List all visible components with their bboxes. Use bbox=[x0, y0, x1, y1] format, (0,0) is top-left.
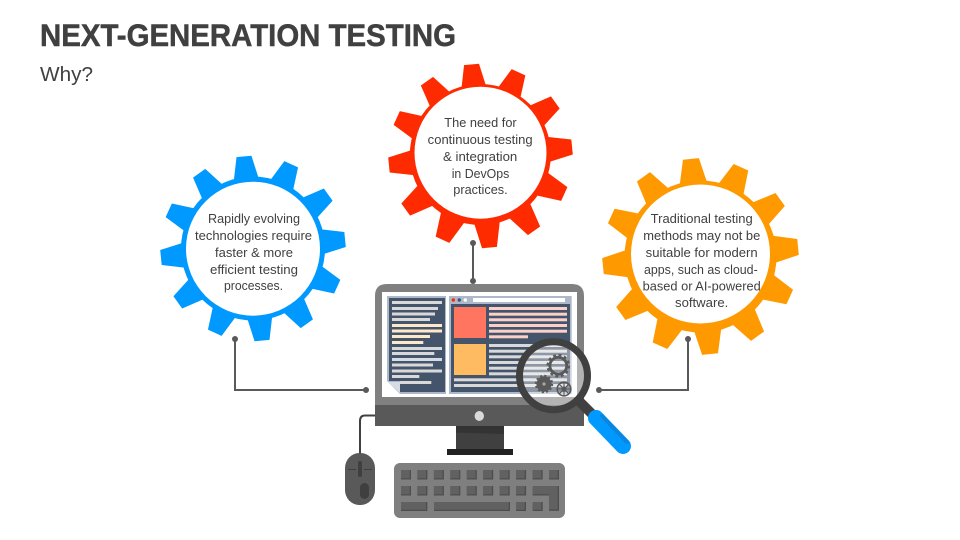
magnifying glass bbox=[515, 340, 627, 446]
text: traditional testing methods: methods may not be bbox=[643, 229, 760, 243]
text: traditional testing methods: software. bbox=[675, 296, 728, 310]
keyboard bbox=[394, 463, 565, 518]
gear shape: blue bbox=[152, 147, 354, 350]
text: rapidly evolving technologies bbox=[195, 212, 312, 293]
text: rapidly evolving technologies: processes. bbox=[224, 279, 283, 293]
browser window panel bbox=[449, 296, 572, 394]
lens gears bbox=[536, 355, 571, 396]
text: traditional testing methods: apps, such as cloud- bbox=[644, 263, 758, 277]
gear shape: red bbox=[380, 55, 581, 257]
text: rapidly evolving technologies: Rapidly evolving bbox=[208, 212, 300, 226]
keyboard key shadows bbox=[401, 470, 559, 511]
text: continuous testing need: The need for bbox=[444, 116, 517, 130]
gear center: orange bbox=[631, 184, 770, 324]
text: traditional testing methods: suitable for modern bbox=[646, 246, 758, 260]
text: traditional testing methods: Traditional testing bbox=[651, 212, 753, 226]
mouse bbox=[345, 453, 375, 505]
monitor stand bbox=[447, 426, 513, 455]
text: rapidly evolving technologies: faster & more bbox=[215, 246, 293, 260]
magnifier handle bbox=[578, 400, 627, 446]
gear center: red bbox=[414, 87, 546, 219]
text: continuous testing need: & integration bbox=[443, 150, 517, 164]
text: traditional testing methods bbox=[643, 212, 761, 310]
code document panel bbox=[387, 296, 446, 394]
title: NEXT-GENERATION TESTING bbox=[40, 17, 456, 53]
gear center: blue bbox=[186, 182, 320, 316]
text: continuous testing need: in DevOps bbox=[452, 167, 509, 181]
panel: orange gear bbox=[593, 149, 808, 364]
mouse cable bbox=[360, 416, 376, 454]
magnifier lens bbox=[523, 346, 584, 406]
connector: top gear to monitor bbox=[470, 240, 476, 284]
power button bbox=[475, 411, 484, 421]
subtitle: Why? bbox=[40, 63, 93, 86]
connector: right gear to monitor bbox=[596, 336, 691, 393]
screen bbox=[382, 292, 577, 397]
text: continuous testing need: continuous testing bbox=[428, 133, 533, 147]
monitor chin bbox=[375, 405, 584, 426]
gear shape: orange bbox=[593, 149, 808, 364]
text: continuous testing need: practices. bbox=[453, 183, 508, 197]
magnifier ring bbox=[520, 342, 588, 410]
monitor bezel bbox=[375, 284, 584, 405]
monitor bbox=[375, 284, 584, 455]
connector: left gear to monitor bbox=[232, 336, 369, 393]
text: rapidly evolving technologies: efficient testing bbox=[210, 263, 298, 277]
text: continuous testing need bbox=[428, 116, 533, 197]
panel: blue gear bbox=[152, 147, 354, 350]
text: traditional testing methods: based or AI-powered bbox=[643, 280, 761, 294]
keyboard key faces bbox=[401, 470, 558, 510]
panel: red gear bbox=[380, 55, 581, 257]
text: rapidly evolving technologies: technologies require bbox=[195, 229, 312, 243]
